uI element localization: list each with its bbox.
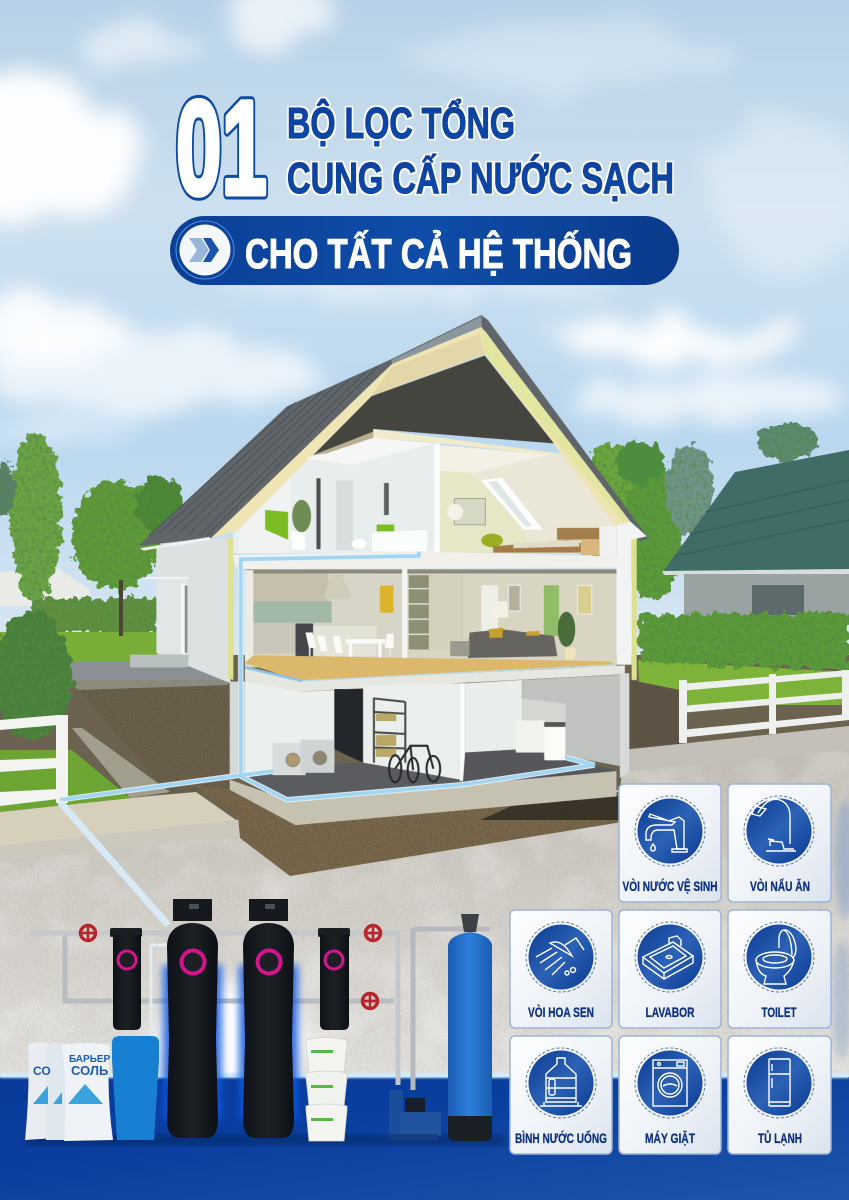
- icon: shower head: [536, 938, 584, 975]
- card: bathroom tap: VÒI NƯỚC VỆ SINH: [622, 877, 718, 894]
- annex wall: [156, 537, 231, 683]
- service cards grid: [510, 784, 831, 1154]
- concrete ground: [0, 726, 849, 1100]
- foundation: [230, 771, 616, 825]
- brine tank: [112, 1036, 159, 1140]
- card: toilet: [728, 910, 831, 1028]
- card: washing machine: MÁY GIẶT: [645, 1130, 695, 1146]
- card: kitchen tap: VÒI NẤU ĂN: [750, 877, 810, 894]
- icon: chevrons: [176, 221, 234, 279]
- softener tanks: [163, 899, 298, 1138]
- icon: toilet: [756, 930, 796, 984]
- gable framing: [211, 327, 637, 680]
- big number 01: [176, 74, 267, 223]
- salt bags: СО: [33, 1064, 51, 1078]
- background trees and hedges: [0, 422, 818, 662]
- icon: kitchen faucet with hose: [752, 799, 796, 851]
- upper cream joist: [373, 429, 561, 455]
- card: shower: VÒI HOA SEN: [528, 1003, 594, 1020]
- card: toilet: TOILET: [762, 1004, 797, 1020]
- water pump: [388, 1090, 441, 1140]
- attic ceiling: [312, 356, 554, 456]
- card: bathroom tap: [619, 784, 721, 902]
- card: water bottle: BÌNH NƯỚC UỐNG: [515, 1129, 607, 1146]
- background sky with clouds: [0, 0, 849, 700]
- cartridge filters: [110, 928, 350, 1030]
- card: lavabo: LAVABOR: [646, 1004, 694, 1020]
- right hedge, lawn and fence: [630, 612, 849, 748]
- middle floor slab: [245, 665, 625, 692]
- heading line 2: CUNG CẤP NƯỚC SẠCH: [287, 153, 674, 203]
- bedroom: [440, 443, 616, 557]
- card: refrigerator: [728, 1036, 831, 1154]
- salt bags: СОЛЬ: [71, 1063, 108, 1078]
- card: shower: [510, 910, 612, 1028]
- media buckets: [306, 1038, 347, 1141]
- card: water bottle: [510, 1036, 612, 1154]
- card: lavabo: [619, 910, 721, 1028]
- big number 01: 01: [176, 74, 267, 223]
- icon: fridge: [769, 1059, 790, 1106]
- icon: water jug: [540, 1058, 582, 1106]
- middle floor room: [245, 568, 616, 681]
- upper floor slab: [233, 552, 628, 569]
- upper wall left: [233, 438, 434, 553]
- pressure tank: [448, 914, 492, 1141]
- title block: [170, 74, 679, 285]
- banner text: CHO TẤT CẢ HỆ THỐNG: [245, 229, 632, 277]
- filter system pipes: [30, 929, 490, 1090]
- roof: [138, 315, 649, 546]
- pill banner: [170, 216, 679, 285]
- valves: [80, 925, 381, 1009]
- icon: washer: [653, 1060, 687, 1106]
- icon: tap: [646, 814, 687, 852]
- icon: basin: [643, 936, 693, 979]
- salt bags: БАРЬЕР: [69, 1054, 111, 1065]
- water pipes: [60, 552, 594, 800]
- basement: [230, 673, 629, 800]
- card: washing machine: [619, 1036, 721, 1154]
- left bush, lawn, fence, path: [0, 611, 232, 812]
- house cutaway: [60, 315, 649, 825]
- big number 01: 01: [176, 74, 267, 223]
- salt bags: [25, 1042, 113, 1141]
- water inlet pipe from house to filter: [60, 802, 168, 925]
- bathroom fixtures: [265, 478, 427, 552]
- heading line 1: BỘ LỌC TỔNG: [287, 97, 515, 148]
- bottom blue band: [0, 1073, 849, 1200]
- ground backing: [0, 655, 849, 855]
- neighbouring house: [662, 450, 849, 624]
- card: refrigerator: TỦ LẠNH: [758, 1129, 802, 1146]
- card: kitchen tap: [728, 784, 831, 902]
